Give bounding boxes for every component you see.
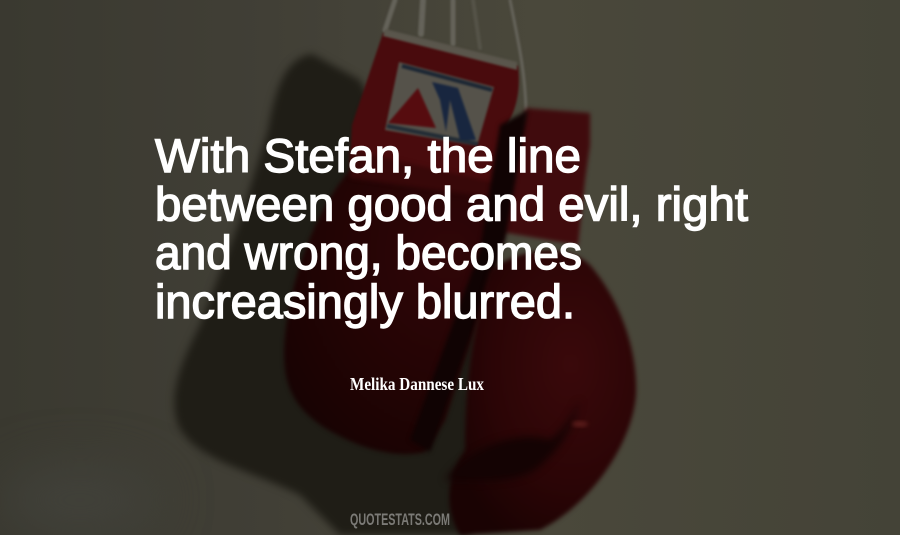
glove body left — [283, 172, 490, 455]
cuff label — [385, 62, 494, 146]
line 2: between good and evil, right — [155, 178, 748, 230]
dark gap — [410, 110, 528, 452]
artwork layer — [0, 0, 638, 535]
highlight — [572, 421, 588, 427]
boxing glove: large left — [284, 29, 520, 454]
right glove cuff — [506, 106, 592, 246]
right glove body — [449, 251, 636, 535]
cuff white top trim — [383, 29, 517, 70]
hanging laces — [385, 0, 526, 110]
line 4: increasingly blurred. — [155, 275, 575, 328]
boxing glove: small right — [410, 108, 636, 535]
background wall — [0, 0, 180, 535]
glove shadow on wall — [174, 54, 480, 535]
quote text — [155, 129, 748, 328]
watermark: QUOTESTATS.COM — [350, 510, 450, 529]
line 3: and wrong, becomes — [155, 226, 582, 279]
line 1: With Stefan, the line — [155, 129, 581, 182]
author: Melika Dannese Lux — [350, 374, 484, 394]
thumb crease — [448, 412, 576, 480]
cuff lower dark band — [349, 152, 490, 196]
cuff — [350, 33, 519, 190]
